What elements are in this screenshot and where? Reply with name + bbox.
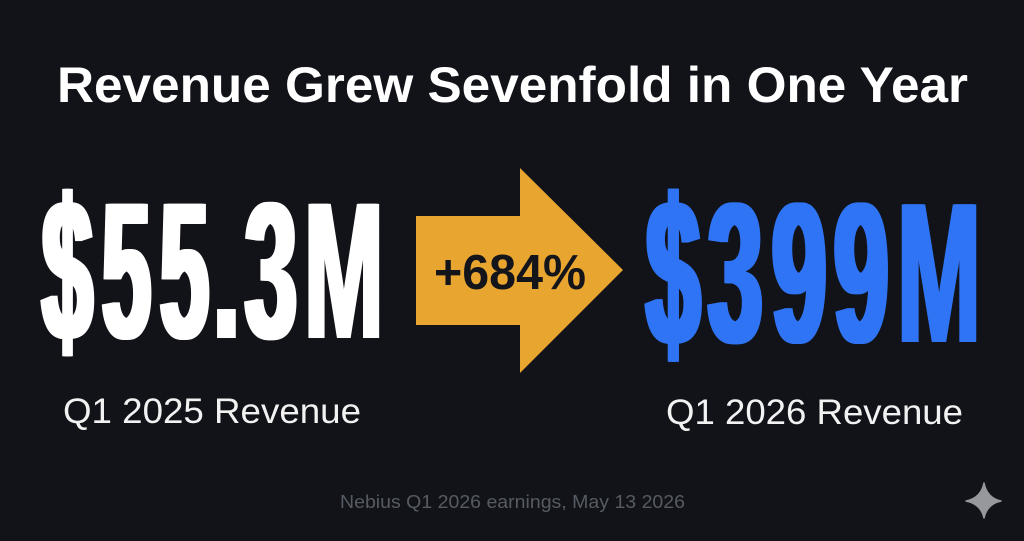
metric: Q1 2025 revenue value: . xyxy=(214,162,239,380)
label: Q1 2026 revenue: Q1 2026 Revenue xyxy=(666,393,963,432)
icon: sparkle xyxy=(966,483,1001,518)
source note: Nebius Q1 2026 earnings, May 13 2026 xyxy=(340,491,685,512)
metric: Q1 2026 revenue value: 3 xyxy=(708,162,762,385)
metric: Q1 2025 revenue value: 5 xyxy=(160,162,208,380)
metric: Q1 2026 revenue value: $ xyxy=(646,154,700,390)
metric: Q1 2025 revenue value: 5 xyxy=(102,162,150,380)
metric: Q1 2026 revenue value: M xyxy=(897,162,981,385)
label: Q1 2025 revenue: Q1 2025 Revenue xyxy=(63,392,361,431)
metric: Q1 2025 revenue value xyxy=(40,156,383,385)
arrow label: percent change: +684% xyxy=(434,246,586,300)
metric: Q1 2026 revenue value: 9 xyxy=(772,162,826,385)
metric: Q1 2026 revenue value: 9 xyxy=(834,162,888,385)
metric: Q1 2025 revenue value: $ xyxy=(42,156,92,385)
metric: Q1 2026 revenue value xyxy=(644,154,981,390)
arrow: growth xyxy=(416,168,623,373)
metric: Q1 2025 revenue value: M xyxy=(304,162,383,380)
metric: Q1 2025 revenue value: 3 xyxy=(244,162,296,380)
title: Revenue Grew Sevenfold in One Year xyxy=(57,57,968,113)
